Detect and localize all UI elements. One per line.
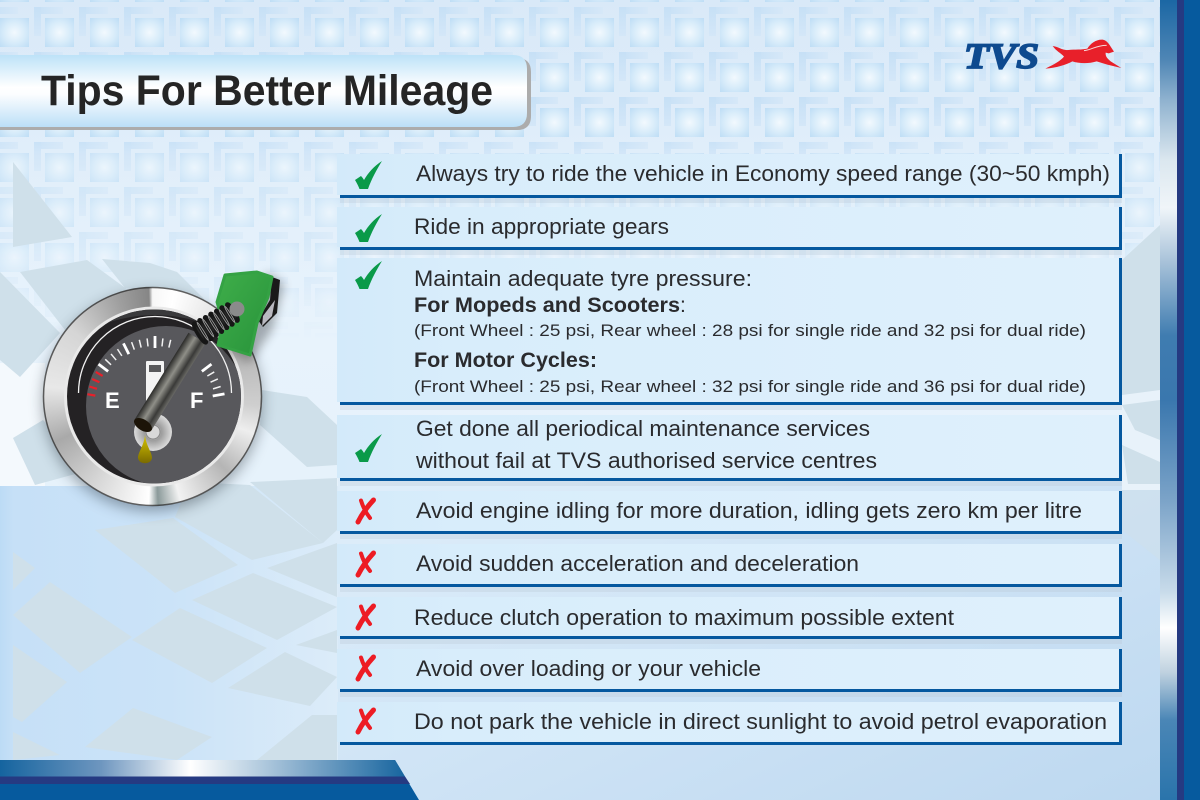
tip 6: Avoid sudden acceleration and deceleration: [416, 551, 859, 576]
tip 3: (Front Wheel : 25 psi, Rear wheel : 28 psi for single ride and 32 psi for dual ride): [414, 321, 1086, 340]
tip 4: Get done all periodical maintenance services: [416, 416, 870, 441]
tip 5: [337, 491, 1122, 539]
tip 8: Avoid over loading or your vehicle: [416, 656, 761, 681]
tip 5: Avoid engine idling for more duration, idling gets zero km per litre: [416, 498, 1082, 523]
tip 4: without fail at TVS authorised service centres: [415, 448, 877, 473]
tip 3: For Motor Cycles:: [414, 349, 597, 372]
tip 3: :: [680, 294, 686, 317]
tip 3: (Front Wheel : 25 psi, Rear wheel : 32 psi for single ride and 36 psi for dual ride): [414, 377, 1086, 396]
fuel gauge with nozzle: [34, 270, 288, 520]
title banner: [0, 55, 531, 130]
tip 4: [337, 415, 1122, 486]
nozzle: [132, 272, 284, 435]
TVS logo: [964, 36, 1122, 75]
tip 9: Do not park the vehicle in direct sunlight to avoid petrol evaporation: [414, 709, 1107, 734]
E label: E: [105, 388, 120, 413]
tip 1: Always try to ride the vehicle in Economy speed range (30~50 kmph): [416, 161, 1110, 186]
tip 7: [337, 597, 1122, 644]
fuel drop: [138, 435, 152, 463]
tip 3: Maintain adequate tyre pressure:: [414, 266, 752, 291]
bottom edge stripes: [0, 760, 419, 800]
centre hub: [134, 413, 172, 451]
title banner: Tips For Better Mileage: [41, 67, 493, 115]
tip 9: [337, 702, 1122, 745]
tip 2: Ride in appropriate gears: [414, 214, 669, 239]
fuel pump glyph: [146, 361, 164, 401]
fuel scale arc and ticks: [78, 317, 232, 396]
tip 6: [337, 544, 1122, 592]
right edge stripes: [1160, 0, 1200, 800]
chrome ring: [43, 287, 262, 506]
TVS logo: TVS: [964, 36, 1039, 75]
tip 1: [337, 154, 1122, 203]
tip 7: Reduce clutch operation to maximum possible extent: [414, 605, 954, 630]
tip 3: [337, 258, 1122, 410]
tip 8: [337, 649, 1122, 697]
tip 2: [337, 207, 1122, 255]
dial face, nozzle and drop: [42, 270, 288, 506]
tip 3: For Mopeds and Scooters: [414, 294, 680, 317]
F label: F: [190, 388, 203, 413]
